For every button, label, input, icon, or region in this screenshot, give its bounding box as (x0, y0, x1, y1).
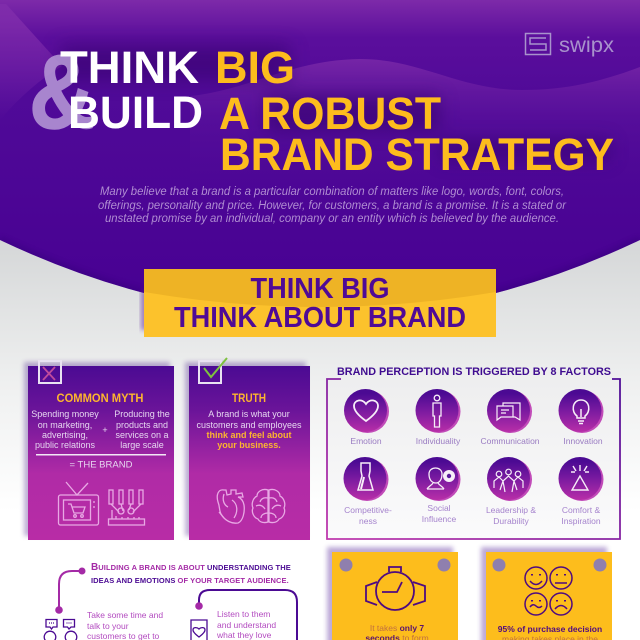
factor: comfort and inspiration: Inspiration (561, 516, 601, 526)
brand understanding heading (91, 562, 291, 585)
listen text: what they love (216, 630, 272, 640)
myth left text: public relations (35, 440, 96, 450)
title white lines: BUILD (68, 87, 203, 138)
title shadow (60, 45, 610, 160)
icon: phone with heart (191, 620, 207, 640)
card pins (340, 558, 352, 572)
myth left text: Spending money (31, 409, 99, 419)
icon: cross checkbox (39, 361, 61, 383)
myth right text: services on a (115, 430, 169, 440)
myth heading: COMMON MYTH (56, 393, 144, 405)
seven seconds text: It takes only 7 (370, 623, 424, 633)
title white lines: THINK (60, 42, 200, 93)
connector: to talk step (55, 568, 86, 614)
talk text: talk to your (87, 621, 129, 631)
brand understanding heading: BUILDING A BRAND IS ABOUT UNDERSTANDING THE (91, 562, 291, 573)
factor: social influence: Social (427, 503, 451, 513)
intro paragraph (98, 186, 567, 225)
factor: emotion: Emotion (350, 436, 382, 446)
banner darker upper area (144, 269, 496, 307)
intro paragraph: Many believe that a brand is a particular combination of matters like logo, words, font, colors, (100, 186, 564, 198)
factor: social influence: Influence (422, 514, 457, 524)
listen text: Listen to them (217, 609, 270, 619)
factor: leadership and durability (486, 457, 536, 526)
truth text: A brand is what your (208, 409, 290, 419)
myth left text: advertising, (42, 430, 88, 440)
header wave: top left (0, 4, 62, 120)
banner: think big think about brand: THINK ABOUT BRAND (174, 302, 466, 334)
icon: robot arms assembly (108, 490, 144, 525)
panel: brand perception (327, 366, 620, 540)
purchase text (498, 624, 602, 640)
myth right text: products and (116, 420, 168, 430)
icon: wristwatch (366, 567, 425, 610)
talk text (87, 610, 163, 640)
card: purchase decisions (481, 547, 612, 640)
banner: think big think about brand (141, 269, 496, 337)
icon: check checkbox (199, 358, 227, 383)
perception heading: BRAND PERCEPTION IS TRIGGERED BY 8 FACTORS (337, 366, 611, 378)
logo: swipx (526, 34, 615, 57)
factor: communication: Communication (480, 436, 540, 446)
talk text: Take some time and (87, 610, 163, 620)
myth right text (114, 409, 170, 450)
title white lines (60, 42, 203, 138)
connector: to listen step (195, 590, 297, 640)
logo: swipx: swipx (559, 34, 615, 57)
factor: innovation (558, 389, 604, 446)
myth left text (31, 409, 99, 450)
factor: comfort and inspiration (558, 457, 604, 526)
icon: tv with shopping cart (58, 482, 98, 525)
factor: individuality: Individuality (416, 436, 461, 446)
factor: competitiveness (344, 457, 392, 526)
title yellow lines: BIG (215, 42, 295, 93)
truth text (196, 409, 302, 450)
plus sign: + (102, 425, 108, 435)
step: listen to them (191, 609, 276, 640)
icon: brain (252, 489, 285, 523)
title yellow lines (215, 42, 614, 180)
brand understanding heading: IDEAS AND EMOTIONS OF YOUR TARGET AUDIENCE. (91, 576, 289, 585)
card pins (492, 558, 506, 572)
factor: communication (480, 389, 540, 446)
factor: individuality (416, 389, 461, 446)
myth right text: large scale (120, 440, 164, 450)
factor: competitiveness: Competitive- (344, 505, 392, 515)
header wave: centre (190, 59, 640, 190)
truth text: think and feel about (206, 430, 292, 440)
equals the brand: = THE BRAND (70, 460, 133, 470)
intro paragraph: offerings, personality and price. However, for customers, a brand is a promise. It is a stated or (98, 200, 567, 212)
myth left text: on marketing, (38, 420, 92, 430)
title yellow lines: BRAND STRATEGY (220, 129, 614, 180)
panel: truth (185, 358, 310, 540)
factor: emotion (344, 389, 389, 446)
title (29, 34, 614, 180)
listen text: and understand (217, 620, 276, 630)
factor: innovation: Innovation (563, 436, 603, 446)
truth text: your business. (217, 440, 281, 450)
header panel (0, 0, 640, 316)
factor: leadership and durability: Leadership & (486, 505, 536, 515)
truth text: customers and employees (196, 420, 302, 430)
step: talk to customers (44, 610, 163, 640)
icon: heart organ (217, 490, 244, 523)
factor: competitiveness: ness (359, 516, 377, 526)
factor: social influence (416, 457, 460, 524)
panel: common myth (24, 361, 174, 540)
title yellow lines: A ROBUST (219, 88, 441, 139)
factor: leadership and durability: Durability (493, 516, 529, 526)
seven seconds text (365, 623, 429, 640)
icon: people talking (44, 620, 77, 640)
factor: comfort and inspiration: Comfort & (562, 505, 600, 515)
header bottom edge shade (0, 240, 640, 293)
truth heading: TRUTH (232, 393, 266, 405)
card: seven seconds (327, 547, 458, 640)
icon: four faces (525, 567, 572, 615)
banner: think big think about brand: THINK BIG (250, 273, 390, 305)
myth right text: Producing the (114, 409, 170, 419)
listen text (216, 609, 276, 640)
purchase text: 95% of purchase decision (498, 624, 602, 634)
perception frame (327, 379, 620, 539)
ampersand: & (29, 34, 95, 151)
intro paragraph: unstated promise by an individual, company or an entity which is believed by the audience. (105, 213, 559, 225)
